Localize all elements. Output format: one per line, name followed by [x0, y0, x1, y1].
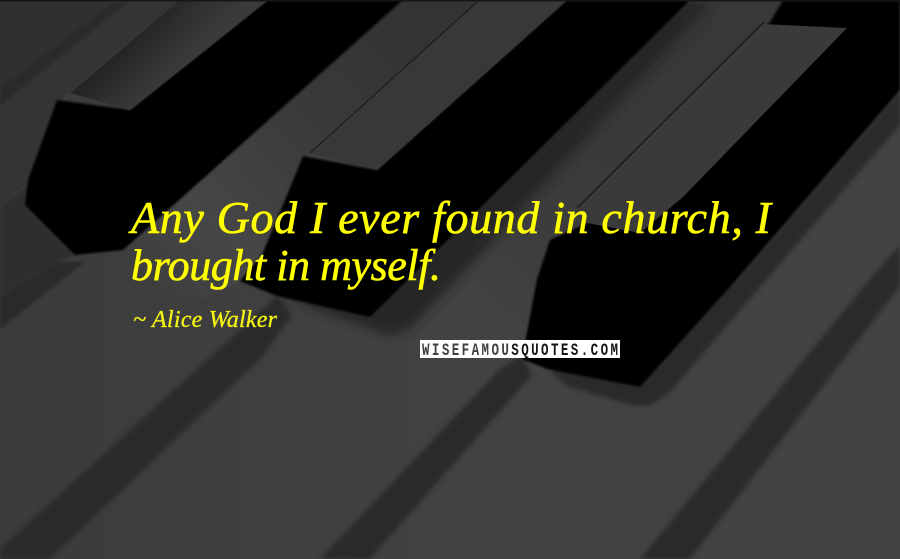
quote text: Any God I ever found in church, I: [128, 192, 774, 243]
black key: centre: [240, 0, 717, 336]
black key: left: [25, 0, 403, 255]
key top: centre: [310, 0, 567, 170]
black key: right: [522, 0, 900, 406]
quote text: brought in myself.: [131, 241, 441, 290]
key top: right: [577, 24, 847, 233]
author attribution: ~ Alice Walker: [133, 307, 278, 333]
crack between keys: [310, 2, 477, 153]
watermark: WISEFAMOUSQUOTES.COM: [422, 340, 618, 361]
crack beside right key: [577, 22, 764, 208]
quote text: [128, 192, 774, 290]
top edge line: [0, 0, 900, 2]
key top: left: [70, 0, 268, 110]
